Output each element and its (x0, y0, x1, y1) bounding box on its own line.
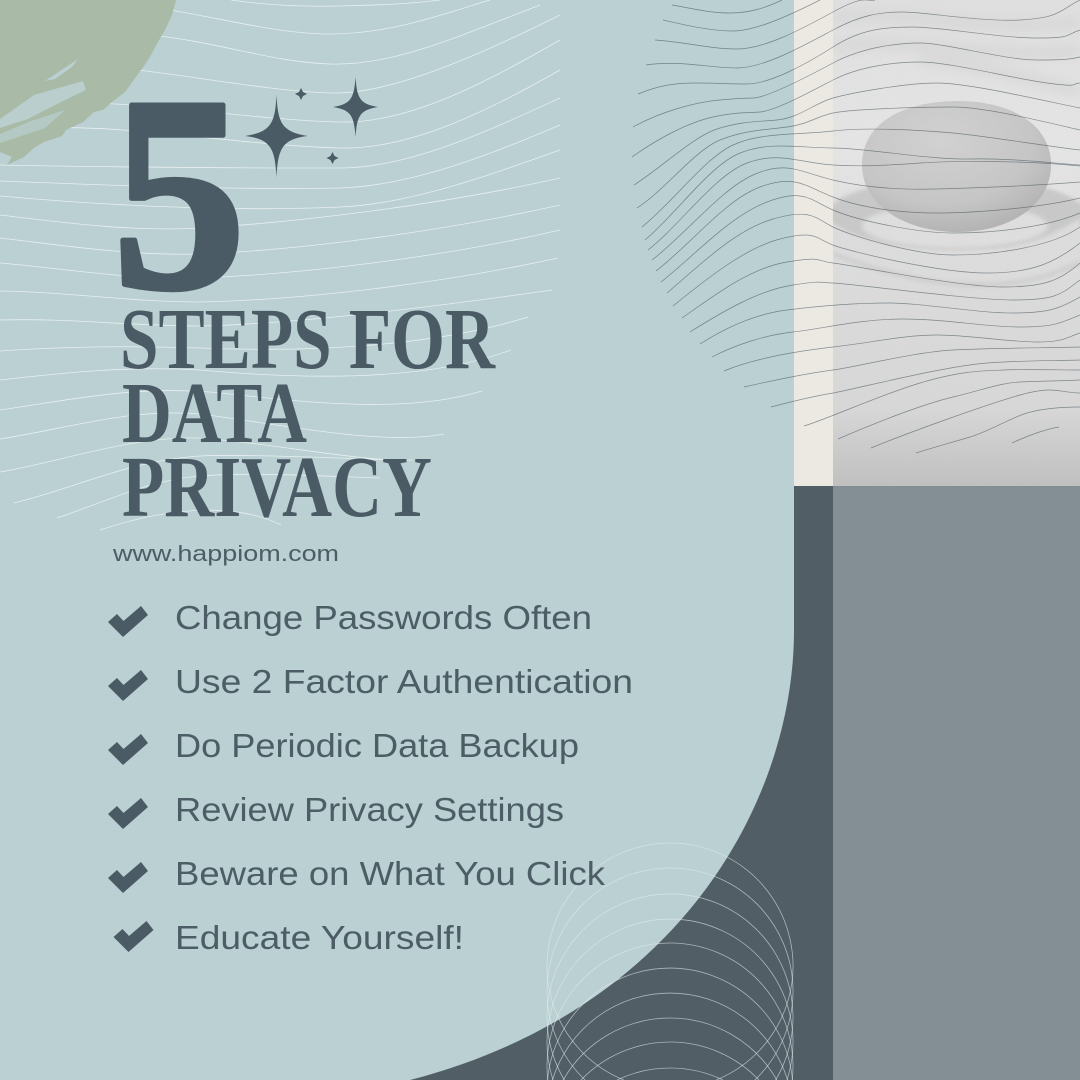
title: steps for data privacy (120, 290, 496, 535)
item: educate yourself: Educate Yourself! (175, 919, 464, 956)
item: change passwords: Change Passwords Often (175, 599, 592, 636)
panel: zen stone photo (828, 0, 1080, 486)
item: two factor authentication: Use 2 Factor Authentication (175, 663, 633, 700)
title: steps for data privacy: STEPS FOR (120, 290, 496, 387)
item: review privacy settings: Review Privacy Settings (175, 791, 564, 828)
panel: curved teal shape (0, 0, 794, 1080)
decoration: white wave lines (0, 0, 560, 530)
decoration: dark wave lines (632, 0, 1080, 453)
website url: www.happiom.com (112, 541, 339, 566)
title: number 5: 5 (112, 40, 246, 348)
decoration: green brush stroke (0, 0, 176, 165)
panel: cream strip (794, 0, 833, 486)
panel: dark slate block (794, 486, 833, 1080)
title: steps for data privacy: PRIVACY (122, 438, 432, 535)
panel: grey block (833, 486, 1080, 1080)
panel: dark slate behind curve (380, 620, 794, 1080)
title: steps for data privacy: DATA (122, 364, 307, 461)
decoration: concentric arches bottom (547, 843, 793, 1080)
checklist (108, 599, 633, 956)
item: periodic backup: Do Periodic Data Backup (175, 727, 579, 764)
item: beware on what you click: Beware on What You Click (175, 855, 606, 892)
icon: sparkles (245, 77, 378, 178)
